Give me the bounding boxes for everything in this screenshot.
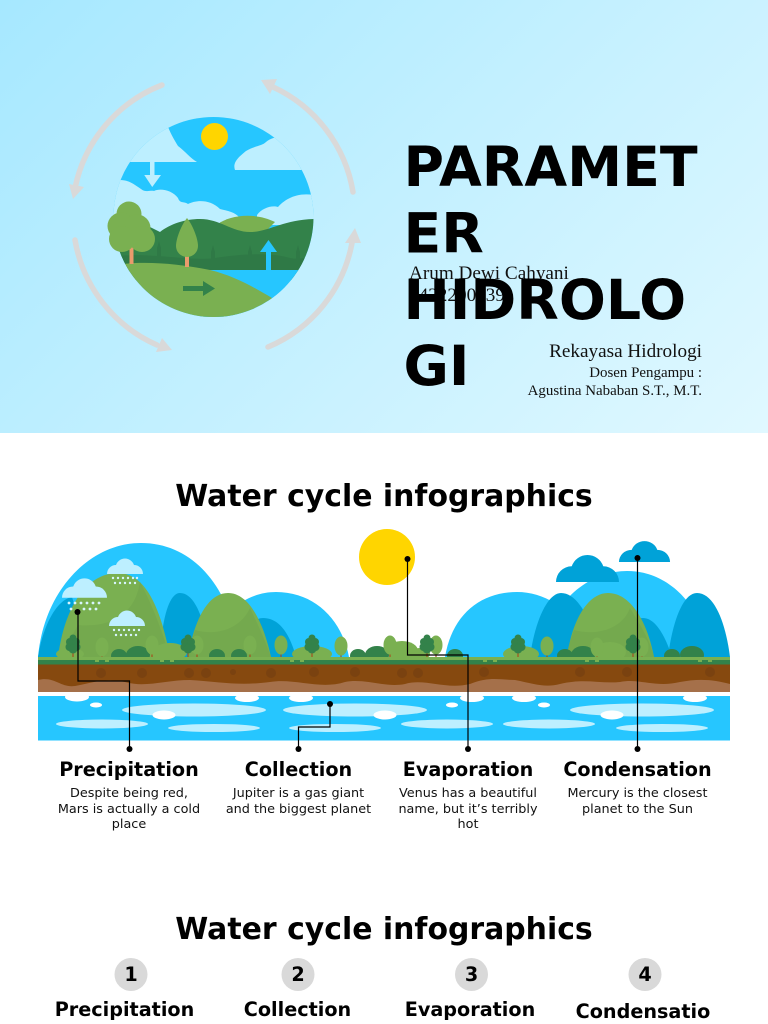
water band xyxy=(38,692,730,740)
dark bushes xyxy=(111,646,704,664)
title: GI xyxy=(404,335,469,399)
item: evaporation: Evaporation xyxy=(403,758,533,781)
course and lecturer: Rekayasa Hidrologi xyxy=(549,341,702,362)
icon: up arrow evaporation xyxy=(260,240,277,270)
ground strip xyxy=(38,657,730,665)
title: ER xyxy=(404,202,484,266)
step 1 xyxy=(55,958,194,1021)
soil layers xyxy=(38,664,730,692)
item: collection xyxy=(226,758,371,817)
course and lecturer xyxy=(528,341,702,399)
item: precipitation: Mars is actually a cold xyxy=(58,802,200,817)
icon: sun in disc xyxy=(201,123,228,150)
course and lecturer: Agustina Nababan S.T., M.T. xyxy=(528,383,702,399)
item: evaporation: name, but it’s terribly xyxy=(398,802,538,817)
name and student number: Arum Dewi Cahyani xyxy=(409,263,569,284)
icon: cycle arrows ring xyxy=(69,79,361,352)
step 3: Evaporation xyxy=(405,998,535,1021)
item: evaporation: Venus has a beautiful xyxy=(399,786,537,801)
item: precipitation: Despite being red, xyxy=(70,786,188,801)
step 1: Precipitation xyxy=(55,998,194,1021)
condensation clouds xyxy=(556,541,670,582)
connector: precipitation xyxy=(74,609,132,752)
step 4: Condensatio xyxy=(576,1000,710,1023)
green hills xyxy=(58,573,654,657)
step 4 xyxy=(576,958,710,1023)
item: condensation: Condensation xyxy=(563,758,712,781)
icon: right arrow runoff xyxy=(183,281,215,296)
item: evaporation: hot xyxy=(458,817,478,832)
title: HIDROLO xyxy=(404,269,686,333)
item: collection: Jupiter is a gas giant xyxy=(232,786,364,801)
name and student number xyxy=(409,263,569,306)
item: evaporation xyxy=(398,758,538,832)
icon: landscape water cycle disc xyxy=(108,117,314,317)
item: precipitation: place xyxy=(112,817,146,832)
hill shading xyxy=(65,582,654,657)
trees xyxy=(66,634,648,659)
light bushes xyxy=(56,641,626,662)
item: precipitation: Precipitation xyxy=(59,758,199,781)
step 2: Collection xyxy=(244,998,351,1021)
name and student number: 1422200139 xyxy=(409,285,505,306)
item: condensation: Mercury is the closest xyxy=(568,786,707,801)
heading: second water cycle infographics: Water cycle infographics xyxy=(175,912,593,947)
heading: water cycle infographics: Water cycle infographics xyxy=(175,479,593,514)
icon: left tree xyxy=(108,202,155,264)
item: condensation xyxy=(563,758,712,817)
step 2 xyxy=(244,958,351,1021)
connector: evaporation xyxy=(404,556,471,752)
step 4: 4 xyxy=(638,963,652,986)
course and lecturer: Dosen Pengampu : xyxy=(589,365,702,381)
item: collection: and the biggest planet xyxy=(226,802,371,817)
step 1: 1 xyxy=(124,963,138,986)
item: collection: Collection xyxy=(245,758,352,781)
rain clouds xyxy=(62,559,145,636)
step 2: 2 xyxy=(291,963,305,986)
connector: condensation xyxy=(634,555,640,752)
connector: collection xyxy=(296,701,333,752)
item: condensation: planet to the Sun xyxy=(582,802,693,817)
sky domes xyxy=(38,543,712,657)
header background panel xyxy=(0,0,768,433)
step 3 xyxy=(405,958,535,1021)
sun xyxy=(359,529,415,585)
icon: narrow tree xyxy=(176,218,198,267)
icon: down arrow precipitation xyxy=(144,162,161,187)
water cycle landscape illustration xyxy=(38,529,730,740)
step 3: 3 xyxy=(465,963,478,986)
dark blue hills xyxy=(38,593,730,657)
title: PARAMET xyxy=(404,136,698,200)
item: precipitation xyxy=(58,758,200,832)
